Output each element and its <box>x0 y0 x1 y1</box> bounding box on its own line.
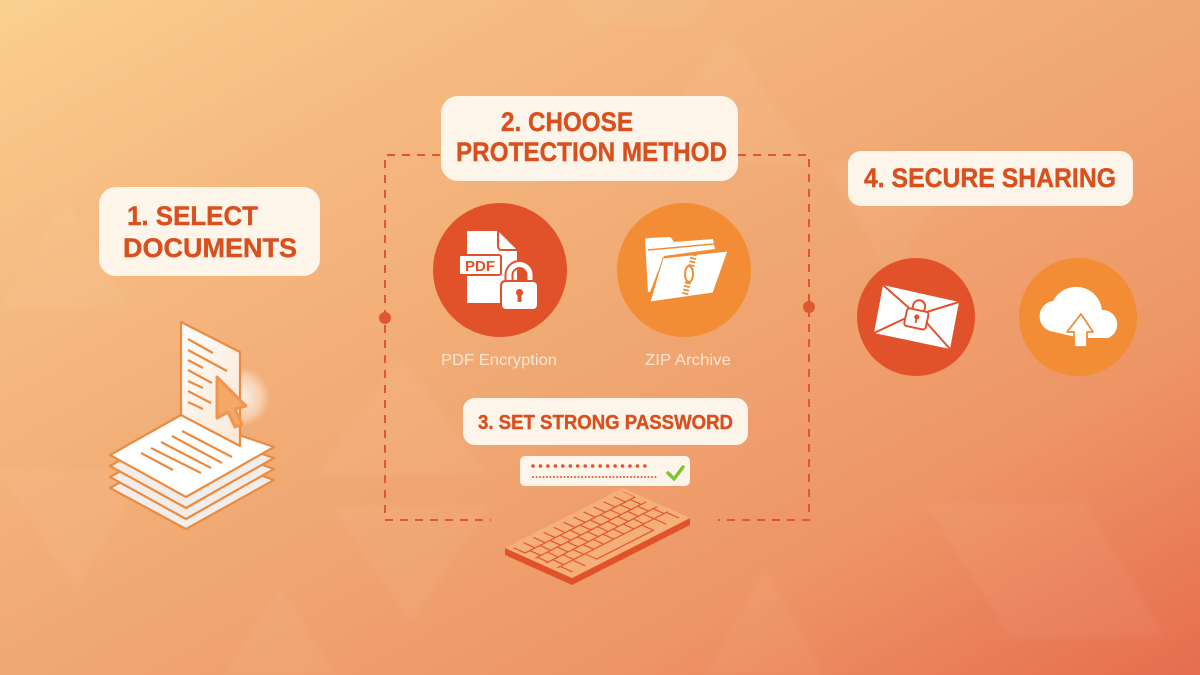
frame node right <box>803 301 815 313</box>
icon: locked email <box>857 258 975 376</box>
cursor arrow <box>217 377 246 427</box>
icon: keyboard <box>505 488 690 585</box>
icon: PDF encryption: PDF <box>465 258 495 275</box>
icon: PDF encryption <box>433 203 567 337</box>
top sheet text lines <box>141 431 232 473</box>
stacked sheets <box>110 415 274 529</box>
step 2 label: PROTECTION METHOD <box>456 137 727 167</box>
cursor glow <box>210 367 270 427</box>
step 3 label <box>463 398 748 445</box>
caption: ZIP Archive: ZIP Archive <box>645 352 731 369</box>
caption: PDF Encryption: PDF Encryption <box>441 352 557 369</box>
icon: cloud upload <box>1019 258 1137 376</box>
upright page <box>181 322 240 446</box>
upright page text lines <box>188 339 227 409</box>
step 4 label: 4. SECURE SHARING <box>864 163 1116 193</box>
step 2 label <box>441 96 738 181</box>
step 1 label <box>99 187 320 276</box>
frame node left <box>379 312 391 324</box>
icon: ZIP archive <box>617 203 751 337</box>
password field <box>520 456 690 486</box>
icon: check mark <box>668 467 683 479</box>
step 4 label <box>848 151 1133 206</box>
icon: document stack with cursor <box>110 322 274 529</box>
step 3 label: 3. SET STRONG PASSWORD <box>478 412 733 434</box>
step 1 label: 1. SELECT <box>127 201 258 231</box>
step 1 label: DOCUMENTS <box>123 233 297 263</box>
dashed protection frame <box>385 155 809 520</box>
step 2 label: 2. CHOOSE <box>501 107 633 137</box>
